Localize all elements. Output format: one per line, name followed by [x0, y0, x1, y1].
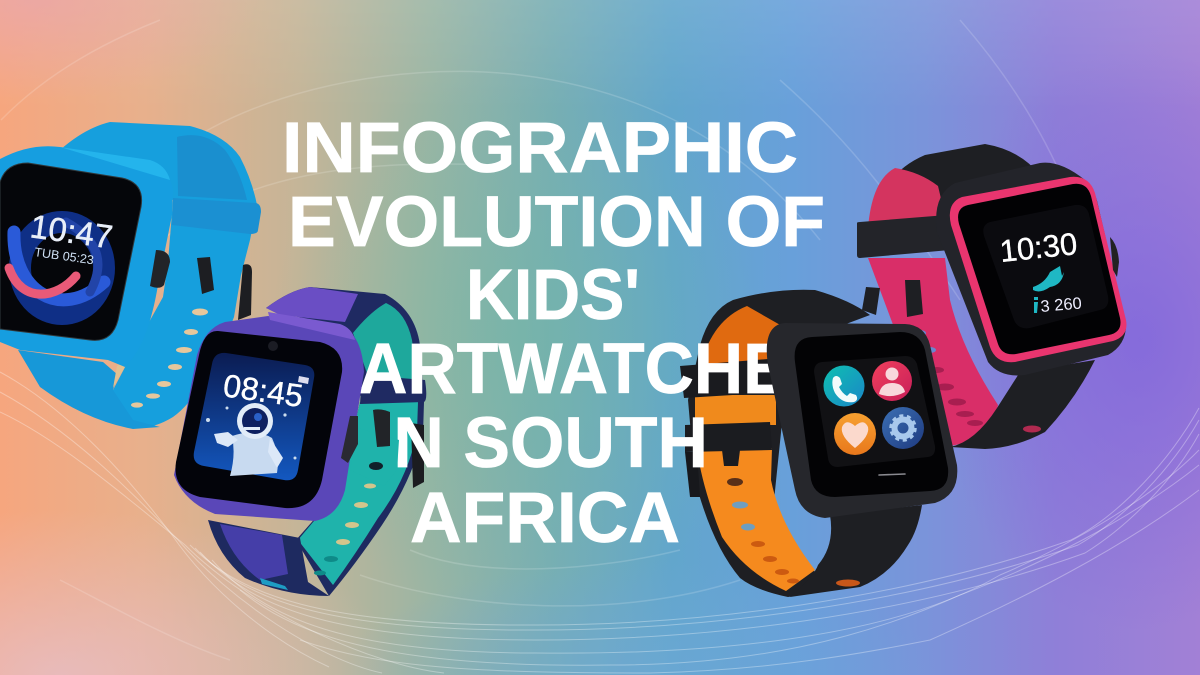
purple screen	[176, 331, 342, 508]
blue buckle	[238, 264, 252, 320]
pink bezel	[950, 177, 1126, 362]
orange inner strap	[701, 306, 782, 365]
title line 1: INFOGRAPHIC	[282, 109, 798, 188]
title line 4: SMARTWATCHES	[256, 330, 834, 409]
pink strap dot	[1023, 426, 1041, 432]
pink back strap	[870, 144, 1040, 232]
pink strap holes	[914, 330, 936, 353]
home bar	[879, 474, 905, 475]
title line 5: IN SOUTH	[374, 404, 708, 483]
pink case	[936, 163, 1126, 375]
teal strap holes	[336, 484, 376, 545]
purple crown	[341, 416, 358, 463]
purple camera	[268, 341, 278, 351]
pink buckle and keeper	[862, 280, 923, 317]
blue strap holes	[131, 308, 208, 408]
teal strap hole	[369, 462, 383, 470]
blue date: TUB 05:23	[34, 245, 95, 267]
teal inner strap	[353, 303, 418, 385]
title line 6: AFRICA	[410, 479, 680, 558]
app: phone	[824, 366, 864, 406]
teal strap over title	[350, 428, 399, 486]
battery icon	[298, 376, 309, 384]
purple case highlight	[268, 312, 355, 340]
black strap outer	[688, 290, 870, 597]
blue swirl face	[9, 222, 104, 314]
pink strap loop	[857, 215, 950, 258]
pink time: 10:30	[998, 226, 1079, 269]
purple watch back strap	[266, 287, 426, 596]
pink inner display	[983, 205, 1108, 328]
gap between blue strap and case	[113, 352, 133, 388]
blue lower strap	[18, 350, 160, 429]
teal lower strap	[296, 402, 424, 596]
watch: blue smartwatch	[0, 122, 261, 429]
title	[256, 109, 834, 558]
pink lower strap	[868, 258, 998, 446]
black case	[767, 323, 957, 518]
blue case highlight	[60, 147, 170, 180]
pink steps: 3 260	[1040, 294, 1082, 316]
black strap loops	[680, 358, 780, 398]
purple strap accent	[260, 578, 288, 590]
black watch back strap	[680, 290, 870, 597]
pink steps marker	[1034, 297, 1038, 313]
app: heart	[834, 413, 876, 455]
watch: black smartwatch body	[767, 323, 957, 597]
purple display	[194, 353, 314, 480]
watch: pink smartwatch	[857, 144, 1126, 449]
purple lower strap	[208, 520, 329, 596]
blue strap inner shadow	[177, 135, 247, 200]
blue keeper	[197, 257, 214, 294]
pink strap inner	[868, 168, 947, 228]
blue crown	[150, 250, 170, 288]
pink crown	[1110, 237, 1119, 277]
blue back strap	[60, 122, 257, 428]
orange strap holes	[727, 478, 743, 486]
purple strap loop	[360, 375, 426, 404]
watch: purple smartwatch body	[174, 312, 399, 596]
blue strap loop	[172, 198, 261, 234]
black lower strap	[790, 505, 922, 597]
purple buckle	[411, 423, 424, 488]
title line 3: KIDS'	[466, 256, 640, 335]
pink screen	[958, 184, 1121, 354]
pink lower black strap	[950, 360, 1095, 449]
blue screen	[0, 163, 142, 340]
blue time: 10:47	[28, 207, 115, 255]
purple time: 08:45	[221, 367, 305, 414]
black screen	[795, 332, 948, 497]
purple case	[174, 316, 364, 521]
pink shoe icon	[1033, 266, 1064, 291]
black buckle	[685, 452, 700, 497]
purple strap top	[266, 287, 424, 400]
blue case	[0, 146, 173, 367]
astronaut	[206, 403, 296, 476]
purple keeper	[373, 409, 390, 447]
app: contact	[872, 361, 912, 401]
black strap dot	[836, 580, 860, 586]
app: settings	[882, 407, 924, 449]
title line 2: EVOLUTION OF	[288, 183, 825, 262]
app grid panel	[814, 356, 935, 467]
